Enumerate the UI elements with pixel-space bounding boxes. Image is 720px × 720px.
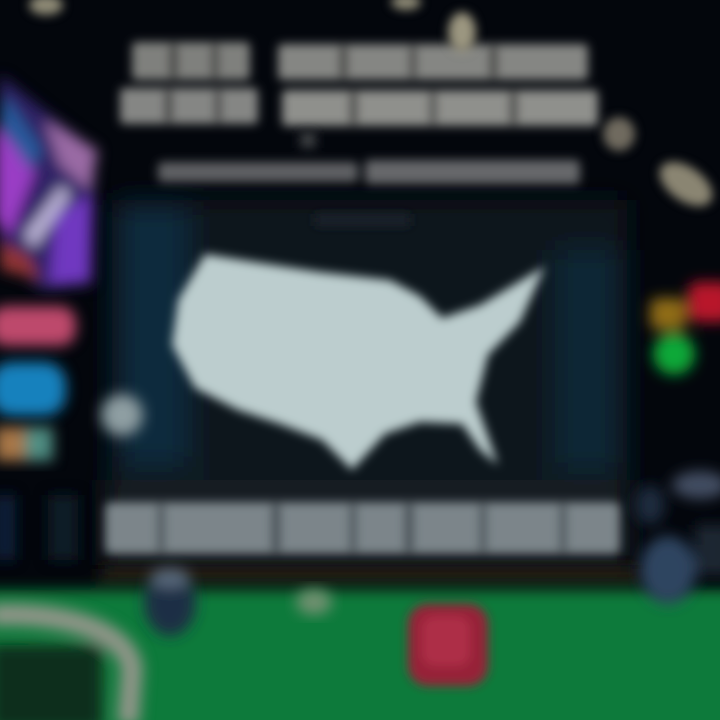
subtitle: blurred line xyxy=(158,132,580,226)
icon: red die xyxy=(408,604,488,686)
map: United States silhouette xyxy=(172,254,545,470)
caption band: blurred text row xyxy=(105,502,620,554)
stack: blue band xyxy=(0,362,66,416)
table: green felt xyxy=(0,568,720,720)
caption band: word gaps xyxy=(158,504,566,552)
panel: central dark navy board xyxy=(105,200,630,565)
title: letter gaps xyxy=(165,44,517,124)
stack: dark blue base xyxy=(0,495,78,560)
title: two blurred heading lines xyxy=(120,42,598,126)
icon: colourful cube, left xyxy=(0,75,98,290)
icon: small round token xyxy=(101,394,143,436)
icon: pale arch, bottom left xyxy=(0,615,132,720)
decorative floating lights xyxy=(29,0,720,215)
icon: chip stack, right xyxy=(635,471,720,604)
stack: multicolour band xyxy=(0,427,53,461)
icon: small pale token on table xyxy=(296,589,332,615)
stack: pink band xyxy=(0,306,76,346)
icon: traffic-light coloured cluster, right xyxy=(650,282,720,375)
icon: chip stack, centre left xyxy=(144,568,196,636)
